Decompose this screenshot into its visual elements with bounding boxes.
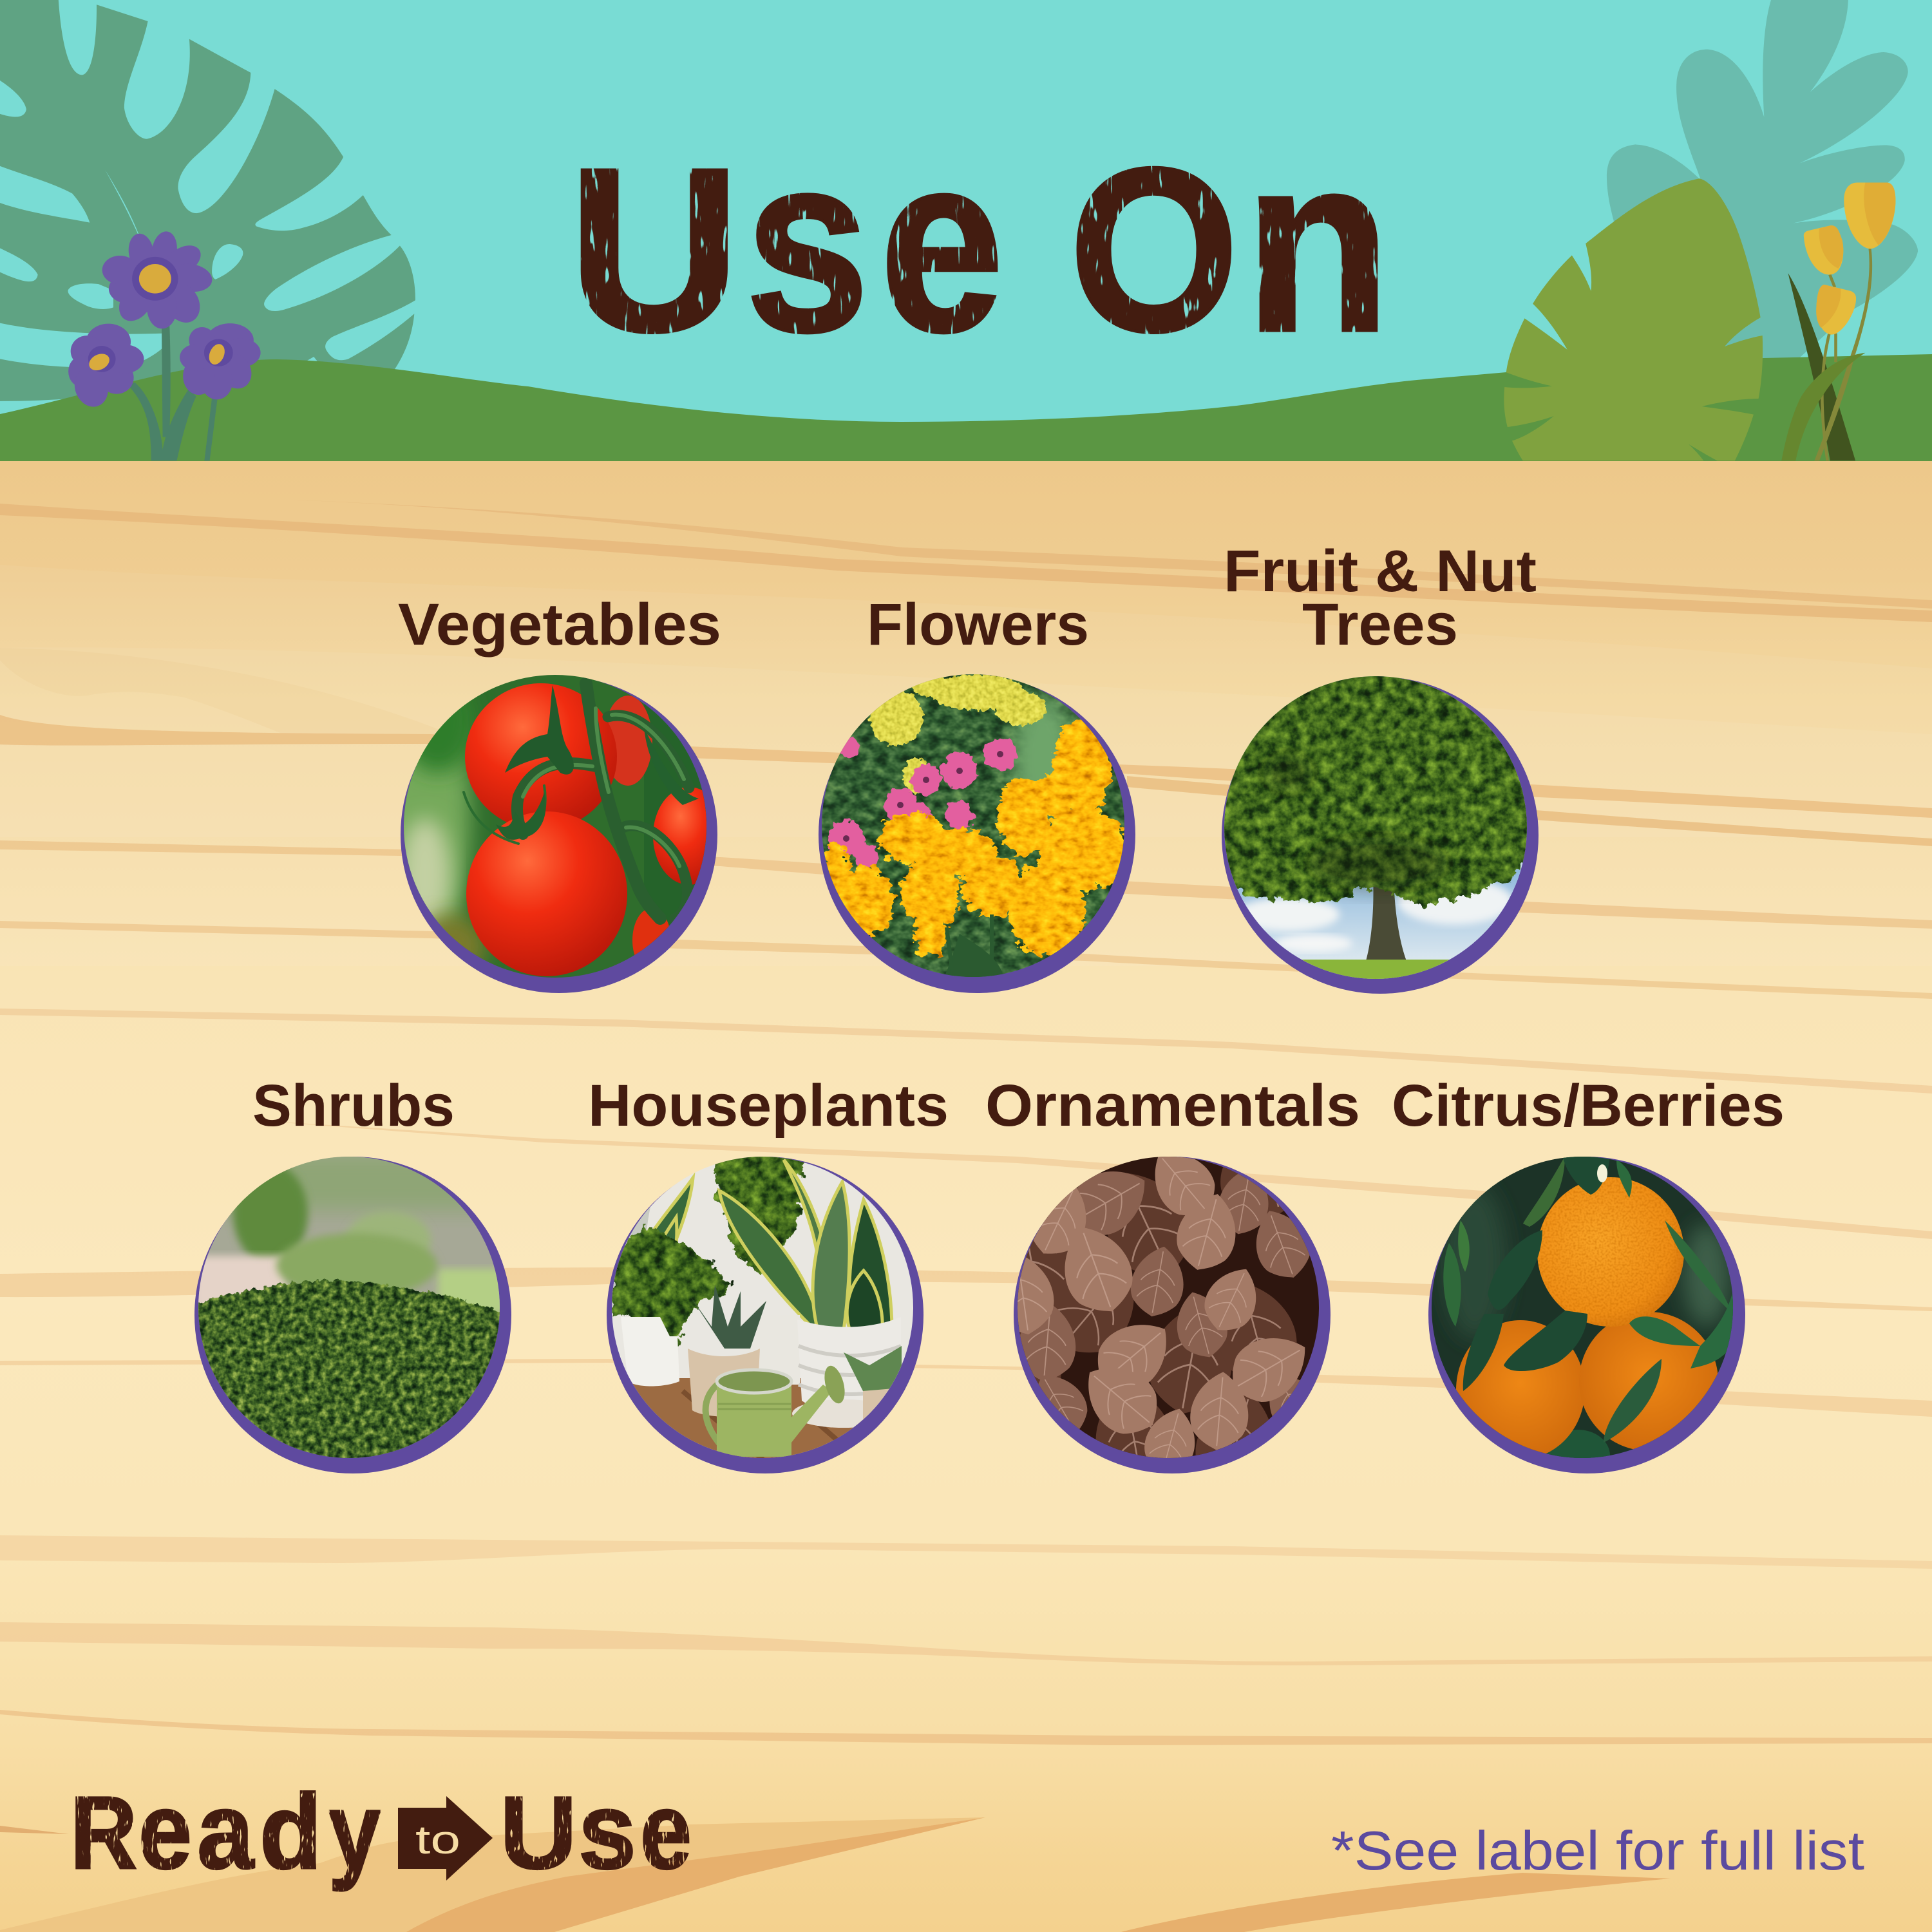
ring: [607, 1157, 923, 1473]
ring: [819, 676, 1135, 993]
label: Ornamentals: Ornamentals: [985, 1073, 1360, 1139]
logo word: Ready: d: [260, 1772, 322, 1891]
logo word: Ready: y: [328, 1770, 381, 1891]
title: U: [568, 119, 741, 380]
label: Fruit & Nut Trees: Trees: [1302, 592, 1458, 658]
footnote: *See label for full list: [1331, 1821, 1864, 1882]
hill: [0, 354, 1932, 461]
icon: yellow tulips: [1781, 183, 1895, 460]
arrow with "to": [398, 1796, 493, 1880]
panel: Vegetables: [380, 592, 725, 993]
panel: Flowers: [818, 592, 1135, 993]
ring: [1222, 677, 1539, 994]
logo word: Ready: a: [197, 1770, 255, 1891]
photo: houseplants: [605, 1153, 921, 1468]
ring: [1428, 1157, 1745, 1473]
panel: header scene: [0, 0, 1932, 461]
icon: purple flowers: [68, 230, 261, 460]
label: Flowers: Flowers: [867, 592, 1089, 658]
label: Houseplants: Houseplants: [588, 1073, 949, 1139]
ring: [1014, 1157, 1331, 1473]
right back leaf: [1607, 0, 1918, 362]
wood background: [0, 461, 1932, 1932]
panel: Ornamentals: [988, 1083, 1358, 1473]
label: Citrus/Berries: Citrus/Berries: [1392, 1073, 1785, 1139]
logo: Ready to Use: [70, 1770, 692, 1891]
panel: Houseplants: [588, 1073, 949, 1473]
right green leaf: [1504, 178, 1763, 460]
panel: Shrubs: [187, 1073, 511, 1475]
photo: tree: [1224, 676, 1527, 979]
panel: Citrus/Berries: [1392, 1073, 1785, 1481]
title: s: [745, 102, 869, 384]
ring: [194, 1157, 511, 1473]
photo: flowers: [818, 670, 1133, 985]
label: Shrubs: Shrubs: [252, 1073, 455, 1139]
logo word: Ready: R: [70, 1775, 137, 1890]
logo word: Use: e: [640, 1770, 692, 1891]
arrow with "to": to: [415, 1818, 460, 1862]
photo: tomatoes: [404, 675, 706, 978]
photo: hedge: [198, 1157, 500, 1458]
monstera leaf: [0, 0, 415, 418]
logo word: Use: U: [500, 1775, 577, 1890]
title: n: [1244, 103, 1391, 384]
logo word: Ready: e: [138, 1770, 192, 1891]
label: Fruit & Nut Trees: Fruit & Nut: [1224, 538, 1537, 604]
label: Vegetables: Vegetables: [398, 592, 721, 658]
panel: Fruit & Nut Trees: [1211, 538, 1546, 994]
logo word: Use: s: [578, 1770, 636, 1891]
photo: brown leaves: [1018, 1157, 1319, 1458]
photo: oranges: [1426, 1153, 1748, 1481]
ring: [401, 676, 717, 993]
title: e: [880, 102, 1004, 384]
title: O: [1069, 119, 1239, 380]
